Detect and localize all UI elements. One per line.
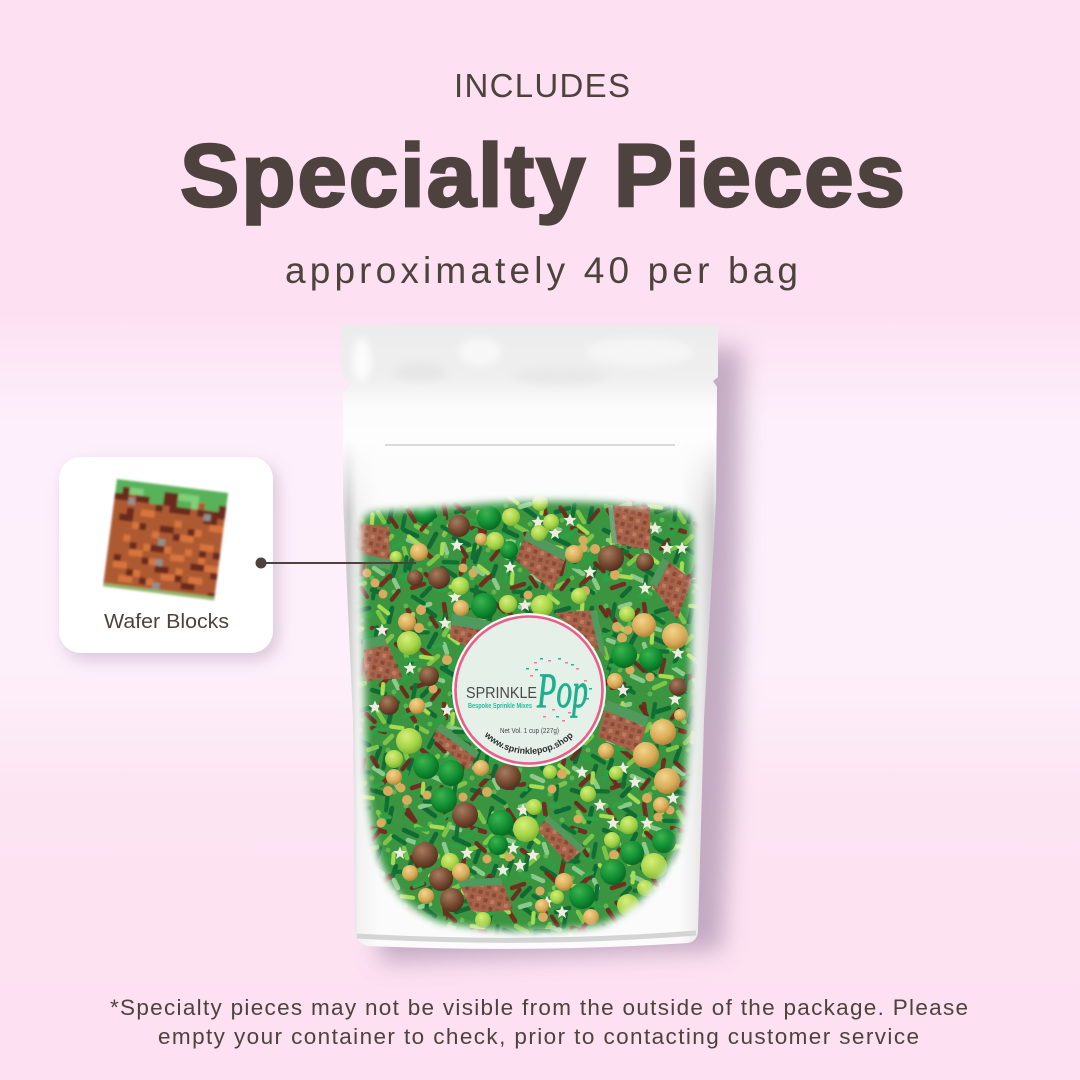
logo tagline: Bespoke Sprinkle Mixes <box>468 701 532 710</box>
brown candy balls <box>379 515 687 912</box>
net volume: Net Vol. 1 cup (227g) <box>500 726 559 735</box>
confetti dots <box>530 660 587 722</box>
logo script: Pop: Pop <box>536 662 588 718</box>
eyebrow: INCLUDES: INCLUDES <box>454 67 630 104</box>
window with sprinkle mix <box>356 494 700 938</box>
icon: dirt wafer block <box>103 479 228 600</box>
sprinkle texture <box>356 495 699 938</box>
pouch top smudges <box>341 325 719 515</box>
card caption: Wafer Blocks <box>104 611 229 633</box>
card background <box>59 457 273 653</box>
callout card: Wafer Blocks <box>59 457 273 653</box>
footnote: empty your container to check, prior to contacting customer service <box>158 1024 919 1049</box>
gold candy balls <box>386 533 688 925</box>
logo word: SPRINKLE: SPRINKLE <box>466 685 537 702</box>
bag shadow <box>380 348 742 962</box>
wafer blocks in the bag <box>358 505 692 912</box>
product bag <box>341 325 754 974</box>
white star sprinkles <box>368 514 688 918</box>
footnote <box>110 995 968 1049</box>
small gold nonpareils <box>362 536 674 922</box>
curved website: www.sprinklepop.shop <box>485 732 572 756</box>
title: Specialty Pieces: Specialty Pieces <box>180 125 905 225</box>
subtitle: approximately 40 per bag: approximately 40 per bag <box>285 250 798 291</box>
pouch bottom seam <box>357 933 696 940</box>
pouch body <box>341 325 718 949</box>
lime candy balls <box>385 495 667 928</box>
dark green candy balls <box>413 502 676 909</box>
round Sprinkle Pop label <box>452 613 606 767</box>
footnote: *Specialty pieces may not be visible from the outside of the package. Please <box>110 995 968 1020</box>
connector line with dot <box>256 558 416 568</box>
